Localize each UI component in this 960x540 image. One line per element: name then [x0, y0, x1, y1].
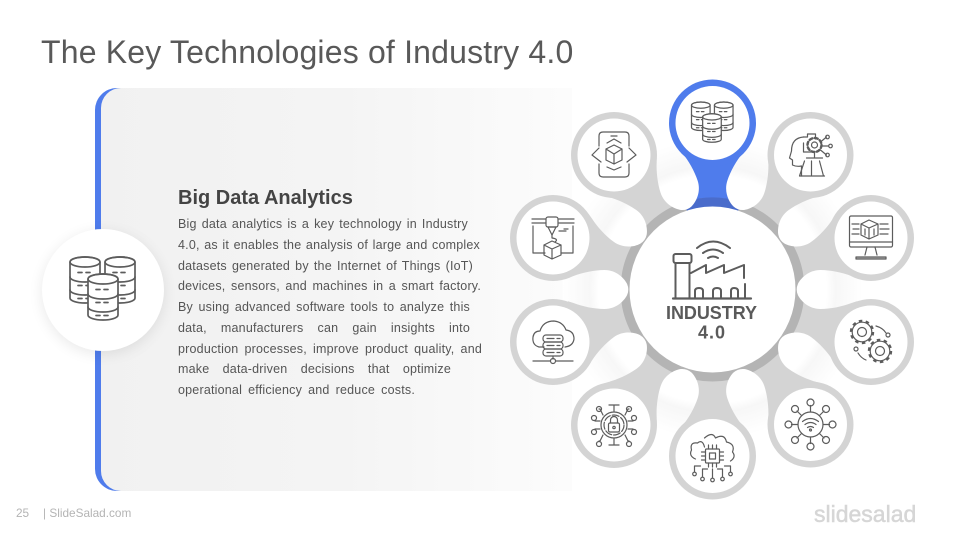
- hub connectors: [562, 141, 862, 438]
- logo: slidesalad: slidesalad: [814, 501, 916, 527]
- node: big data (active): [669, 80, 756, 166]
- node: 3d printing: [510, 195, 596, 281]
- node: artificial intelligence head: [768, 112, 854, 198]
- node: augmented reality: [571, 112, 657, 198]
- text block: description: devices, sensors, and machines in a smart factory.: [178, 279, 481, 293]
- node: cyber security: [571, 382, 657, 468]
- text block: description: data, manufacturers can gain insights into: [178, 321, 470, 335]
- text block: description: [178, 217, 482, 397]
- panel: big data analytics: [95, 88, 424, 491]
- text block: description: production processes, improve product quality, and: [178, 342, 482, 356]
- text block: description: datasets generated by the Internet of Things (IoT): [178, 258, 473, 272]
- text block: description: operational efficiency and reduce costs.: [178, 383, 415, 397]
- title: The Key Technologies of Industry 4.0: [41, 34, 573, 70]
- icon: big data badge: [42, 229, 164, 351]
- footer: page number: 25: [16, 506, 29, 520]
- node: automation gears: [828, 299, 914, 385]
- heading: big data analytics: Big Data Analytics: [178, 187, 353, 209]
- label: industry 4.0: INDUSTRY: [666, 303, 757, 323]
- node: cloud servers: [510, 299, 596, 385]
- label: industry 4.0: [666, 303, 757, 342]
- text block: description: make data-driven decisions that optimize: [178, 362, 451, 376]
- label: industry 4.0: 4.0: [698, 322, 726, 342]
- footer: site name: | SlideSalad.com: [43, 506, 131, 520]
- text block: description: 4.0, as it enables the analysis of large and complex: [178, 238, 480, 252]
- node: ai chip brain: [669, 412, 756, 500]
- node: internet of things: [768, 382, 854, 468]
- node: digital twin monitor: [828, 195, 914, 281]
- text block: description: By using advanced software tools to analyze this: [178, 300, 470, 314]
- icon: factory: [673, 242, 751, 298]
- text block: description: Big data analytics is a key technology in Industry: [178, 217, 468, 231]
